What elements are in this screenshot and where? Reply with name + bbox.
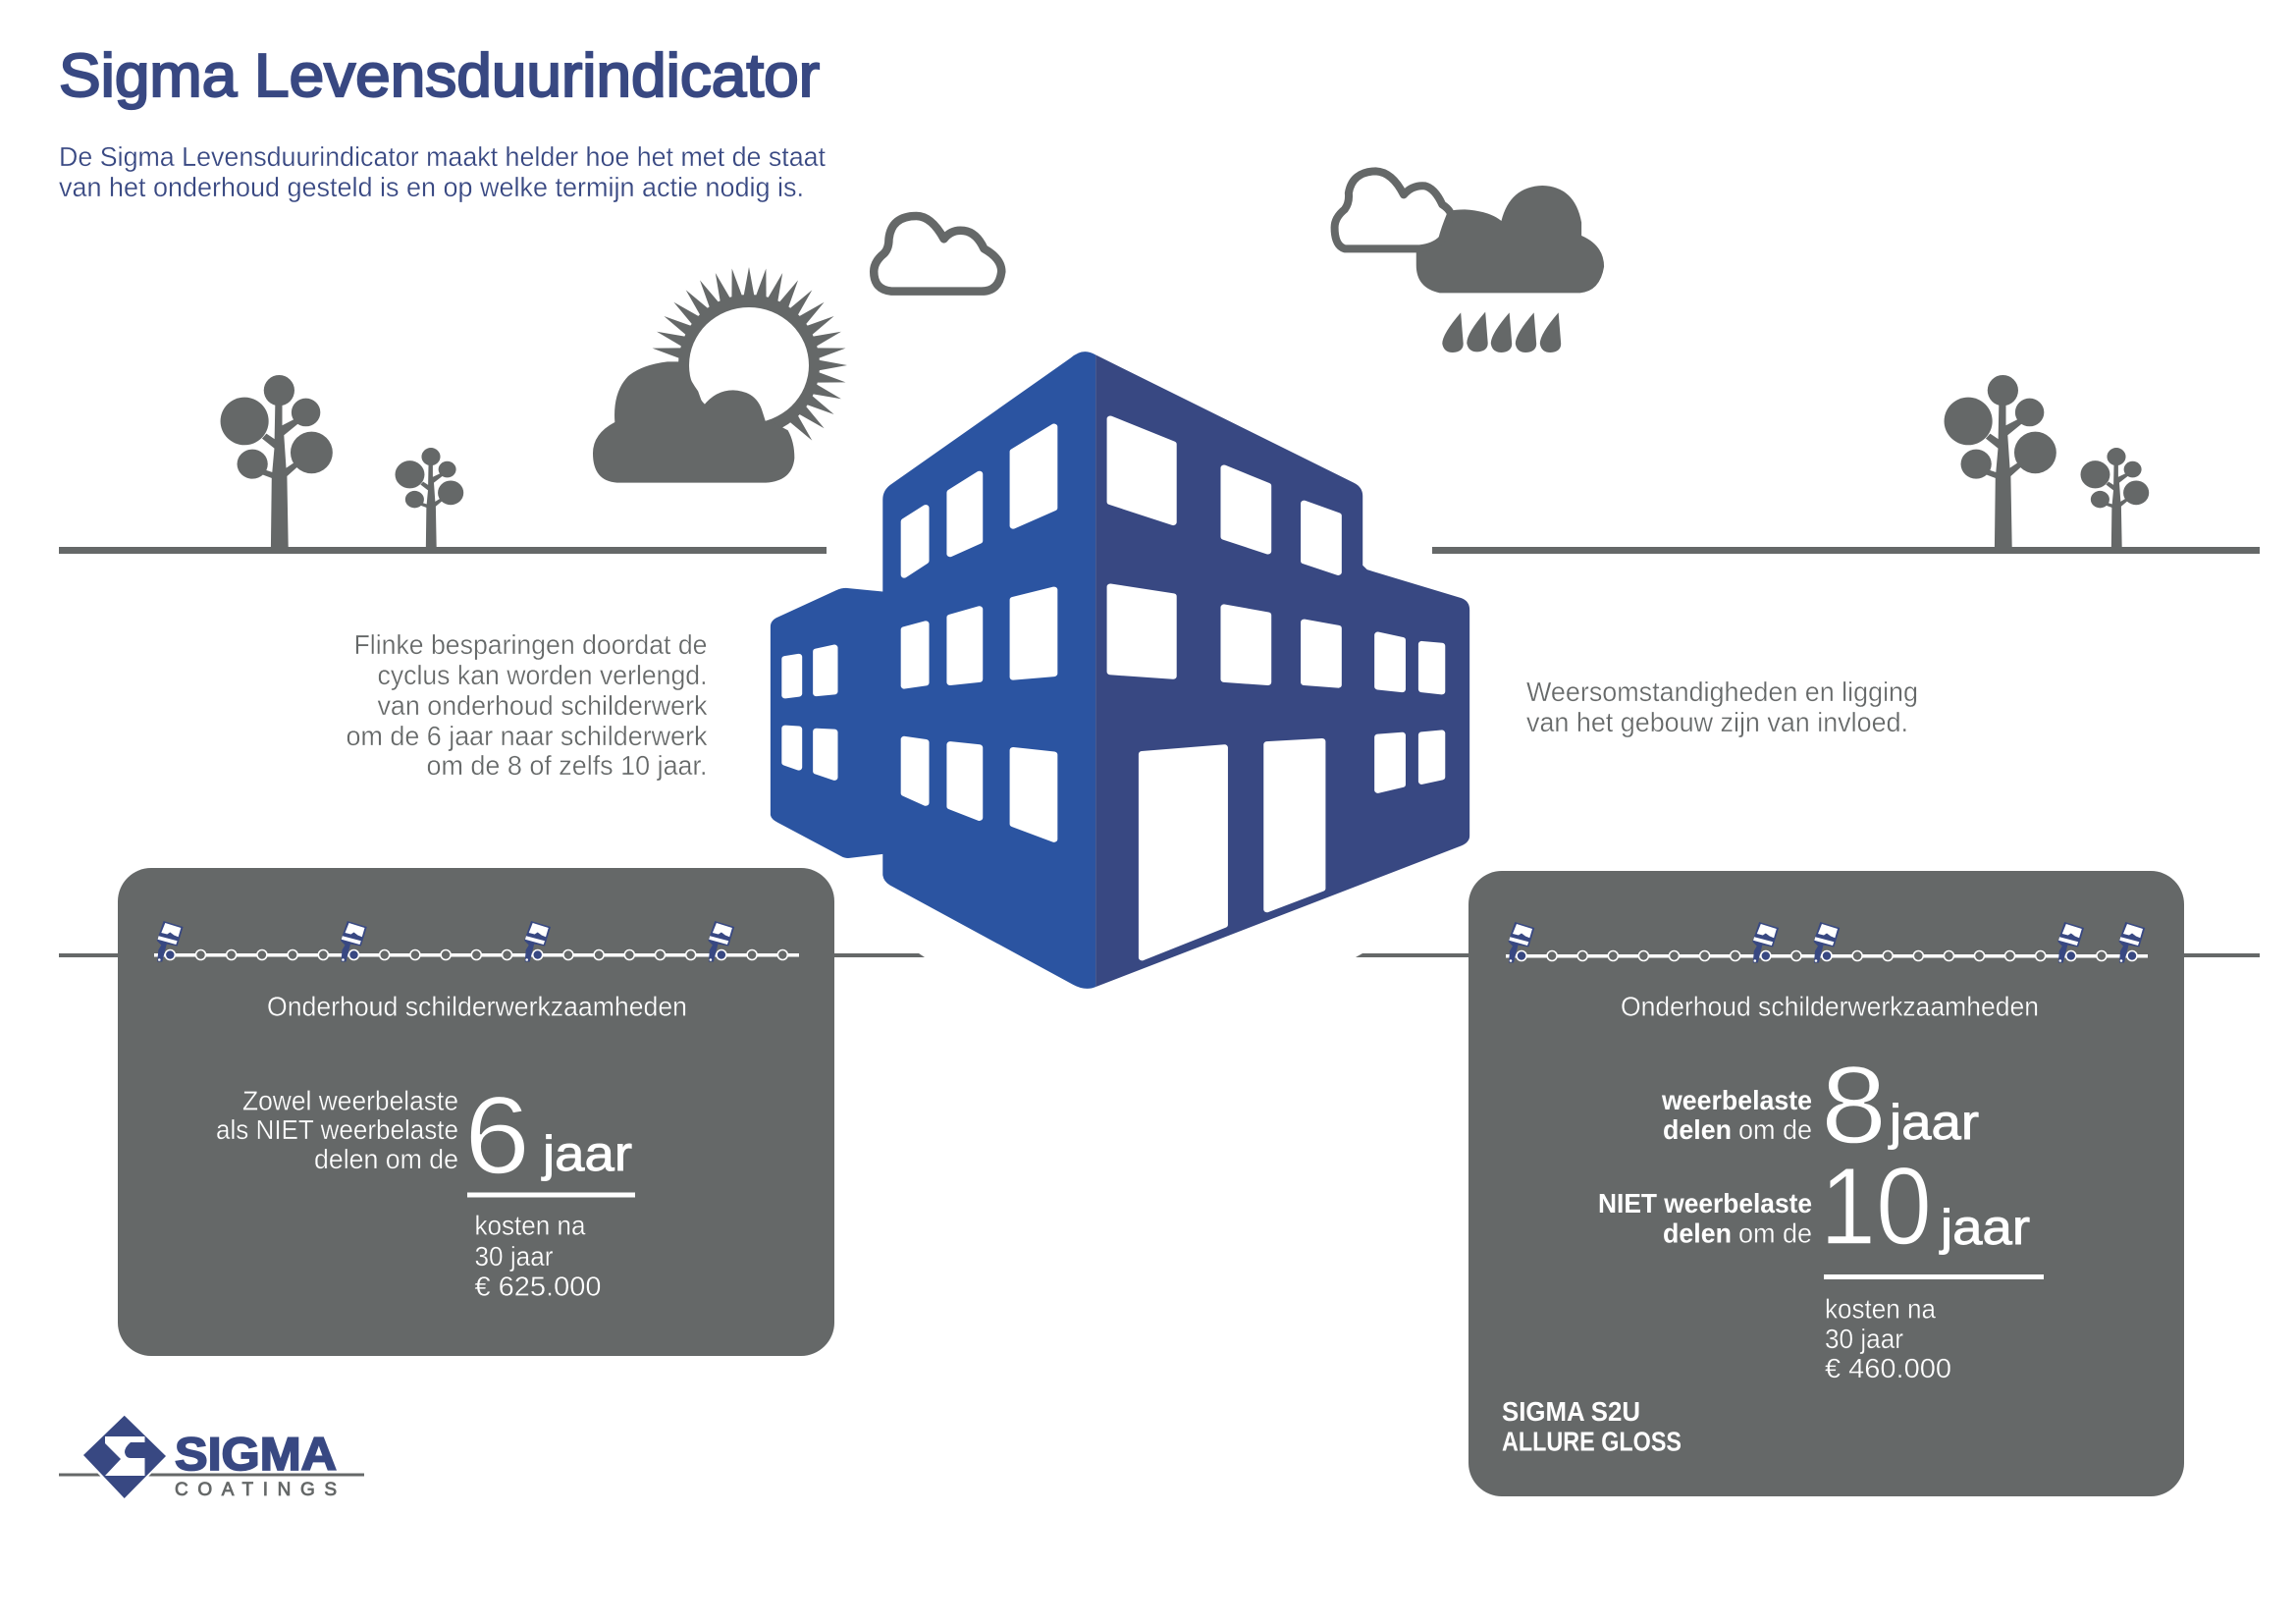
number: 6 jaar: jaar	[541, 1126, 632, 1181]
text: weerbelaste delen: om de	[1738, 1114, 1812, 1145]
text: kosten left: 30 jaar	[475, 1241, 554, 1272]
logo: Sigma Coatings	[59, 1412, 364, 1500]
left ground line	[59, 547, 827, 554]
text: niet weerbelaste delen: delen	[1663, 1218, 1732, 1249]
timeline left	[154, 921, 799, 962]
text: besparingen: om de 8 of zelfs 10 jaar.	[426, 750, 707, 781]
icon: sun behind cloud	[593, 267, 847, 483]
logo: Sigma Coatings: COATINGS	[175, 1480, 337, 1500]
intro text: van het onderhoud gesteld is en op welke termijn actie nodig is.	[59, 172, 804, 202]
tree: small right	[2081, 448, 2149, 549]
text: niet weerbelaste delen: NIET weerbelaste	[1598, 1188, 1812, 1218]
text: besparingen: cyclus kan worden verlengd.	[377, 660, 707, 690]
text: weerbelaste delen: weerbelaste	[1661, 1085, 1812, 1115]
text: delen left: als NIET weerbelaste	[216, 1114, 458, 1145]
text: weerbelaste delen: delen	[1663, 1114, 1732, 1145]
text: besparingen: van onderhoud schilderwerk	[377, 690, 708, 721]
heading right: Onderhoud schilderwerkzaamheden	[1621, 992, 2039, 1021]
text: kosten right: 30 jaar	[1825, 1324, 1903, 1354]
text: kosten left	[475, 1210, 601, 1302]
text: weersomstandigheden: Weersomstandigheden en ligging	[1526, 677, 1918, 707]
icon: outlined cloud	[874, 216, 1001, 292]
logo: Sigma Coatings: SIGMA	[175, 1428, 337, 1480]
text: product name: ALLURE GLOSS	[1502, 1426, 1682, 1457]
tree: large right	[1945, 375, 2056, 550]
text: kosten right	[1825, 1294, 1951, 1383]
text: besparingen: Flinke besparingen doordat de	[353, 629, 707, 660]
icon: rain cloud	[1335, 171, 1604, 352]
tree: small left	[396, 448, 463, 549]
panel: right 8 en 10 jaar	[1468, 871, 2184, 1496]
text: product name: SIGMA S2U	[1502, 1396, 1640, 1427]
number: 8 jaar: jaar	[1888, 1095, 1979, 1150]
number: 6 jaar: 6	[464, 1074, 530, 1197]
number: 8 jaar	[1821, 1044, 1979, 1166]
tree: large left	[221, 375, 333, 550]
text: product name	[1502, 1396, 1682, 1457]
text: kosten left: kosten na	[475, 1210, 586, 1241]
text: besparingen: om de 6 jaar naar schilderwerk	[346, 721, 708, 751]
text: delen left	[216, 1086, 458, 1174]
number: 6 jaar	[464, 1074, 635, 1198]
timeline right	[1506, 922, 2148, 962]
text: weerbelaste delen	[1661, 1085, 1812, 1145]
text: delen left: delen om de	[314, 1144, 458, 1174]
text: delen left: Zowel weerbelaste	[242, 1086, 458, 1115]
heading left: Onderhoud schilderwerkzaamheden	[267, 992, 687, 1021]
number: 8 jaar: 8	[1821, 1044, 1887, 1166]
text: weersomstandigheden: van het gebouw zijn van invloed.	[1526, 707, 1908, 737]
title: Sigma Levensduurindicator	[59, 42, 820, 110]
lower left line	[59, 953, 925, 957]
building	[771, 352, 1469, 989]
text: kosten right: kosten na	[1825, 1294, 1936, 1324]
text: niet weerbelaste delen	[1598, 1188, 1812, 1249]
text: kosten left: € 625.000	[475, 1271, 601, 1302]
text: besparingen	[346, 629, 708, 781]
lower right line	[1356, 953, 2260, 957]
text: kosten right: € 460.000	[1825, 1353, 1951, 1383]
number: 10 jaar: jaar	[1939, 1200, 2030, 1255]
panel: left 6 jaar	[118, 868, 834, 1356]
intro text	[59, 141, 826, 202]
number: 10 jaar: 10	[1820, 1145, 1932, 1268]
right ground line	[1432, 547, 2260, 554]
text: niet weerbelaste delen: om de	[1738, 1218, 1812, 1249]
intro text: De Sigma Levensduurindicator maakt helder hoe het met de staat	[59, 141, 826, 172]
number: 10 jaar	[1820, 1145, 2044, 1279]
text: weersomstandigheden	[1526, 677, 1918, 737]
